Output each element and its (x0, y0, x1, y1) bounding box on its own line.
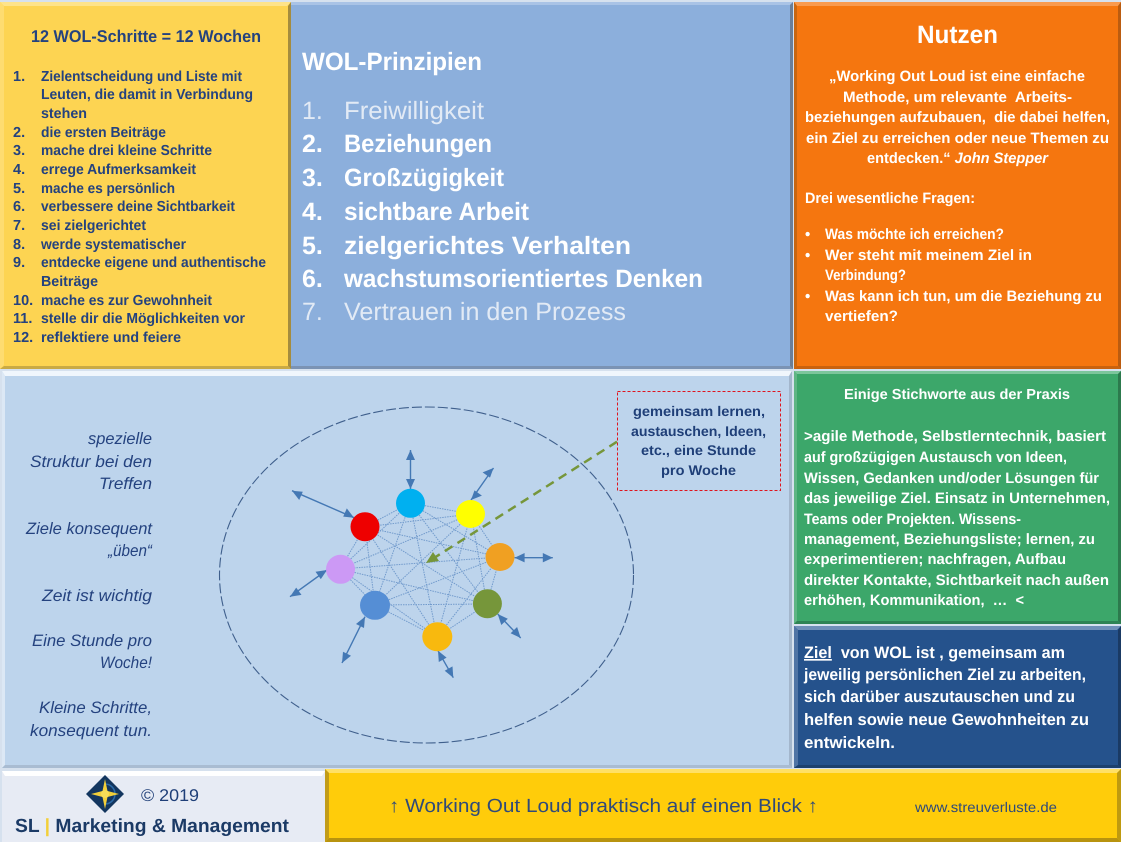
list: seven principles: 2. (302, 130, 323, 158)
text: keyword paragraph: Teams oder Projekten. Wissens- (804, 511, 1021, 528)
list: seven principles (302, 97, 703, 326)
arrow: callout pointer (426, 442, 617, 563)
list: seven principles: 3. (302, 164, 323, 192)
list: seven principles: 7. (302, 298, 323, 326)
text: keyword paragraph: auf großzügigen Austausch von Ideen, (804, 449, 1067, 466)
list: seven principles: 4. (302, 198, 323, 226)
list: twelve steps: werde systematischer (40, 237, 186, 253)
text: goal statement: sich darüber auszutauschen und zu (804, 688, 1075, 706)
list: twelve steps: 7. (13, 218, 25, 234)
list: twelve steps: 9. (13, 255, 25, 271)
list: seven principles: sichtbare Arbeit (344, 198, 530, 226)
text: tagline: ↑ Working Out Loud praktisch auf einen Blick ↑ (389, 796, 818, 817)
arrows: outward connections (290, 450, 553, 678)
text: practice notes: Zeit ist wichtig (41, 587, 153, 605)
text: copyright: © 2019 (141, 786, 199, 805)
panel: WOL principles (291, 2, 793, 369)
list: twelve steps: 6. (13, 199, 25, 215)
quote: John Stepper: „Working Out Loud ist eine einfache (829, 68, 1085, 85)
list: twelve steps: Zielentscheidung und Liste mit (41, 69, 242, 85)
text: goal statement: entwickeln. (804, 734, 895, 752)
callout: learning together: etc., eine Stunde (641, 442, 756, 458)
text: three key questions: vertiefen? (825, 308, 898, 325)
text: keyword paragraph: management, Beziehungsliste; lernen, zu (804, 531, 1095, 548)
text: three key questions: Was möchte ich erreichen? (825, 226, 1004, 243)
list: twelve steps: sei zielgerichtet (41, 218, 146, 234)
callout: learning together: pro Woche (661, 462, 736, 478)
list: twelve steps: stehen (41, 106, 87, 122)
list: seven principles: wachstumsorientiertes Denken (343, 265, 703, 293)
list: twelve steps: reflektiere und feiere (41, 330, 181, 346)
list: twelve steps: 12. (13, 330, 33, 346)
text: three key questions: Wer steht mit meinem Ziel in (825, 247, 1032, 264)
text: practice notes: Struktur bei den (30, 453, 152, 471)
text: three key questions: • (805, 288, 810, 305)
text: goal statement: jeweilig persönlichen Ziel zu arbeiten, (803, 666, 1086, 684)
list: seven principles: Freiwilligkeit (344, 97, 484, 125)
text: three key questions (805, 190, 1102, 325)
icon: compass diamond (86, 775, 124, 813)
text: keyword paragraph: experimentieren; nachfragen, Aufbau (804, 551, 1066, 568)
list: seven principles: zielgerichtes Verhalten (344, 232, 631, 260)
text: company name: SL | Marketing & Management (15, 816, 290, 837)
text: practice notes: spezielle (88, 430, 152, 448)
quote: John Stepper (805, 68, 1110, 167)
list: twelve steps: 1. (13, 69, 25, 85)
callout: learning together: gemeinsam lernen, (633, 403, 765, 419)
list: twelve steps: verbessere deine Sichtbarkeit (41, 199, 235, 215)
list: twelve steps: 3. (13, 143, 25, 159)
panel: 12 WOL steps (0, 2, 291, 369)
quote: John Stepper: entdecken.“ John Stepper (867, 150, 1049, 167)
list: twelve steps: 4. (13, 162, 25, 178)
text: keyword paragraph: >agile Methode, Selbstlerntechnik, basiert (804, 428, 1106, 445)
quote: John Stepper: beziehungen aufzubauen, die dabei helfen, (805, 109, 1110, 126)
heading: WOL-Prinzipien: WOL-Prinzipien (302, 48, 482, 76)
list: twelve steps: mache drei kleine Schritte (41, 143, 212, 159)
text: practice notes: „üben“ (107, 542, 153, 560)
text: three key questions: • (805, 247, 810, 264)
list: twelve steps: errege Aufmerksamkeit (41, 162, 196, 178)
text: three key questions: Drei wesentliche Fragen: (805, 190, 975, 207)
list: twelve steps: 2. (13, 125, 25, 141)
quote: John Stepper: Methode, um relevante Arbeits- (843, 89, 1072, 106)
callout: learning together: austauschen, Ideen, (631, 423, 766, 439)
list: twelve steps: die ersten Beiträge (41, 125, 166, 141)
list: seven principles: Vertrauen in den Prozess (344, 298, 626, 326)
text: practice notes: Woche! (100, 654, 152, 672)
callout: learning together (618, 392, 780, 490)
list: seven principles: Großzügigkeit (344, 164, 505, 192)
list: twelve steps: entdecke eigene und authentische (41, 255, 266, 271)
panel: logo and copyright (2, 771, 325, 842)
list: seven principles: 1. (302, 97, 323, 125)
heading: Stichworte: Einige Stichworte aus der Praxis (844, 387, 1070, 403)
list: twelve steps: Leuten, die damit in Verbindung (41, 87, 253, 103)
list: twelve steps: 8. (13, 237, 25, 253)
chart: team member nodes (326, 489, 514, 651)
text: keyword paragraph: erhöhen, Kommunikation, … < (804, 592, 1024, 609)
text: keyword paragraph: Wissen, Gedanken und/oder Lösungen für (804, 470, 1099, 487)
panel: footer banner (325, 769, 1121, 842)
text: three key questions: • (805, 226, 810, 243)
text: practice notes: konsequent tun. (30, 722, 152, 740)
list: twelve steps: 11. (13, 311, 32, 327)
panel: network diagram area (2, 371, 792, 768)
text: practice notes: Eine Stunde pro (32, 632, 152, 650)
text: practice notes: Ziele konsequent (25, 520, 153, 538)
panel: goal of WOL (794, 626, 1121, 768)
list: twelve steps: 5. (13, 181, 25, 197)
list: twelve steps: stelle dir die Möglichkeiten vor (41, 311, 245, 327)
heading: Nutzen: Nutzen (917, 21, 998, 49)
panel: keywords from practice (794, 371, 1121, 624)
list: twelve steps: Beiträge (41, 274, 98, 290)
text: website: www.streuverluste.de (914, 799, 1057, 815)
chart: connection lines (340, 503, 500, 637)
text: keyword paragraph: das jeweilige Ziel. Einsatz in Unternehmen, (804, 490, 1110, 507)
list: twelve steps: mache es persönlich (41, 181, 175, 197)
text: goal statement: helfen sowie neue Gewohnheiten zu (804, 711, 1089, 729)
text: practice notes (25, 430, 153, 740)
text: goal statement (803, 644, 1089, 752)
list: seven principles: 6. (302, 265, 323, 293)
text: keyword paragraph (804, 428, 1110, 609)
text: practice notes: Kleine Schritte, (39, 699, 152, 717)
list: seven principles: 5. (302, 232, 323, 260)
panel: Nutzen (794, 2, 1121, 369)
text: goal statement: Ziel von WOL ist , gemeinsam am (804, 644, 1065, 662)
chart: circle boundary (220, 407, 634, 743)
text: three key questions: Verbindung? (825, 267, 906, 284)
text: keyword paragraph: direkter Kontakte, Sichtbarkeit nach außen (804, 572, 1109, 589)
text: three key questions: Was kann ich tun, um die Beziehung zu (825, 288, 1102, 305)
list: twelve steps (13, 69, 266, 346)
text: practice notes: Treffen (99, 475, 152, 493)
list: twelve steps: mache es zur Gewohnheit (41, 293, 212, 309)
heading: 12 WOL-Schritte: 12 WOL-Schritte = 12 Wochen (31, 27, 261, 46)
quote: John Stepper: ein Ziel zu erreichen oder neue Themen zu (806, 130, 1109, 147)
list: twelve steps: 10. (13, 293, 33, 309)
list: seven principles: Beziehungen (344, 130, 492, 158)
